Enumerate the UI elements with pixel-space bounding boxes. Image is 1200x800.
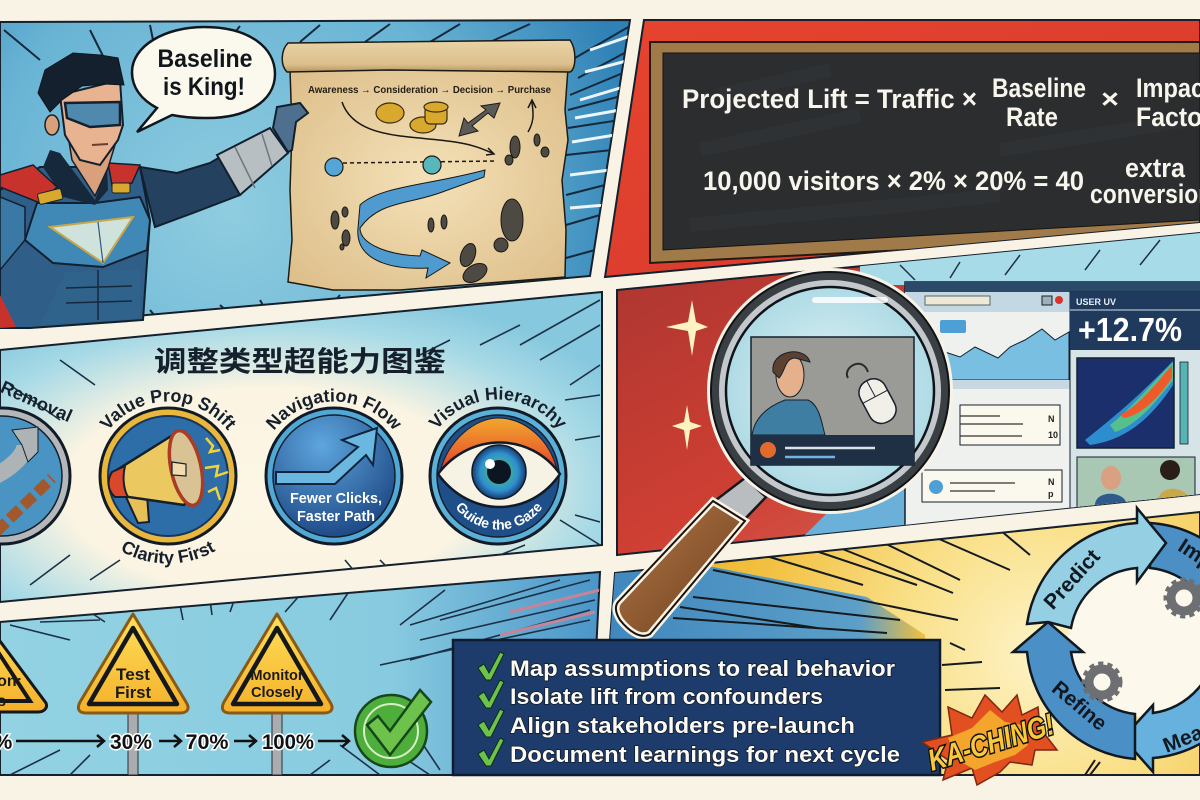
dashboard mockup: USER UV (1076, 297, 1116, 307)
dashboard mockup: 10 (1048, 430, 1058, 440)
badge: value prop shift: Value Prop Shift (98, 390, 236, 431)
heatmap (1077, 358, 1174, 448)
badge: friction removal (0, 377, 75, 544)
iris (472, 445, 526, 499)
lens (707, 268, 953, 514)
panel: hero and funnel scroll (0, 20, 630, 328)
sign poles (128, 708, 282, 775)
sky strip (860, 230, 1200, 285)
hero glove (273, 103, 308, 152)
coins (376, 102, 448, 133)
badge: navigation flow: Navigation Flow (266, 388, 402, 430)
dashboard mockup (905, 282, 1200, 532)
chest plate (25, 197, 150, 267)
bubble text: is King! (163, 73, 245, 101)
panel: adjustment type superpowers (0, 290, 603, 603)
checkmarks (478, 652, 504, 766)
double arrow (459, 103, 500, 136)
footprints (331, 134, 549, 286)
checklist text: Align stakeholders pre-launch (510, 713, 855, 738)
checklist text: Map assumptions to real behavior (510, 656, 895, 681)
metric column (1070, 292, 1200, 532)
funnel stages: Awareness → Consideration → Decision → Purchase (308, 84, 551, 96)
badge: visual hierarchy: Guide the Gaze (457, 503, 542, 530)
panel: ka-ching burst and cycle (600, 508, 1200, 775)
badge: visual hierarchy: Visual Hierarchy (428, 386, 566, 428)
badge: navigation flow: Faster Path (297, 508, 375, 525)
warning sign: test first: First (115, 683, 151, 702)
badge: value prop shift (98, 390, 238, 568)
cycle: impact (1150, 523, 1200, 641)
panel: chalkboard formula (605, 20, 1200, 277)
formula text: Baseline (992, 73, 1086, 103)
route arrow (276, 428, 377, 484)
cycle: predict (1027, 508, 1166, 628)
mouse icon (854, 374, 901, 428)
panel title: 调整类型超能力图鉴 (154, 346, 446, 377)
hair (38, 53, 124, 112)
dashboard mockup: N (1048, 414, 1054, 424)
broken chain (0, 478, 52, 532)
speech bubble (132, 27, 275, 132)
abs (40, 270, 140, 325)
photo strip (1077, 457, 1195, 511)
dotted path (343, 161, 495, 163)
lightning (205, 438, 228, 500)
warning sign: monitor closely (222, 614, 332, 713)
ka-ching burst: KA-CHING! (924, 708, 1058, 778)
bubble text: Baseline (158, 45, 253, 73)
sparkles (666, 300, 708, 450)
chalkboard frame (650, 42, 1200, 263)
scroll funnel map (282, 40, 575, 290)
dashboard mockup: +12.7% (1078, 311, 1182, 348)
rollout percent steps: 100% (262, 731, 314, 754)
checklist text (510, 656, 900, 767)
bubble text (158, 45, 253, 101)
dashboard mockup: p (1048, 489, 1054, 499)
formula text: Rate (1006, 102, 1058, 132)
checklist text: Isolate lift from confounders (510, 684, 823, 709)
panel: rollout warning signs (0, 572, 600, 775)
badge: visual hierarchy (428, 386, 568, 546)
badge: navigation flow (264, 388, 404, 546)
formula text: extra (1125, 153, 1186, 183)
cycle labels: Predict (1040, 545, 1105, 614)
cycle diagram (1013, 508, 1200, 772)
handle (616, 478, 766, 636)
shoulder capes (0, 165, 57, 203)
bracer (217, 128, 288, 195)
journey curves (342, 102, 533, 153)
lower blue corner (804, 489, 915, 536)
dashboard mockup: N (1048, 477, 1054, 487)
formula text (682, 73, 1200, 209)
warning sign: test first (78, 614, 188, 713)
formula text: Projected Lift = Traffic × (682, 84, 977, 114)
formula text: 10,000 visitors × 2% × 20% = 40 (703, 166, 1084, 196)
warning sign: monitor closely: Monitor (250, 667, 304, 684)
gears (1084, 580, 1200, 700)
wrench (0, 445, 25, 478)
shoulder left (0, 197, 25, 270)
rollout percent steps: 70% (186, 731, 229, 754)
shoulder pins (37, 188, 63, 205)
arm (140, 157, 240, 227)
zoomed video tile (751, 337, 914, 465)
cycle labels: Refine (1047, 677, 1111, 735)
badge: navigation flow: Fewer Clicks, (290, 490, 382, 507)
blue button (940, 320, 966, 333)
caption: Clarity First (122, 541, 216, 568)
cycle: measure (1123, 641, 1200, 772)
magnifying glass (616, 268, 953, 636)
checklist text: Document learnings for next cycle (510, 742, 900, 767)
checklist panel (453, 640, 940, 775)
blue arrows (358, 170, 485, 278)
rollout percent steps (0, 731, 349, 754)
cycle labels (1040, 534, 1200, 758)
chalkboard surface (663, 53, 1200, 250)
warning sign: clipped left (0, 617, 47, 712)
cycle: refine (1013, 622, 1135, 759)
warning sign: monitor closely: Closely (251, 684, 304, 701)
rollout percent steps: 30% (110, 731, 152, 754)
torso (0, 167, 150, 328)
line chart (945, 329, 1069, 380)
neck and face (68, 135, 118, 196)
chest emblem (50, 217, 133, 263)
formula text: × (1101, 84, 1119, 114)
success check badge (355, 690, 431, 767)
panel: data magnifier (617, 230, 1200, 555)
megaphone (126, 495, 149, 523)
blue speed wedge (610, 567, 925, 639)
hero character (0, 53, 288, 328)
collar (43, 150, 108, 205)
lens highlight (815, 297, 885, 303)
mask (65, 102, 120, 127)
warning sign: test first: Test (116, 665, 150, 684)
cape sliver (0, 295, 16, 328)
